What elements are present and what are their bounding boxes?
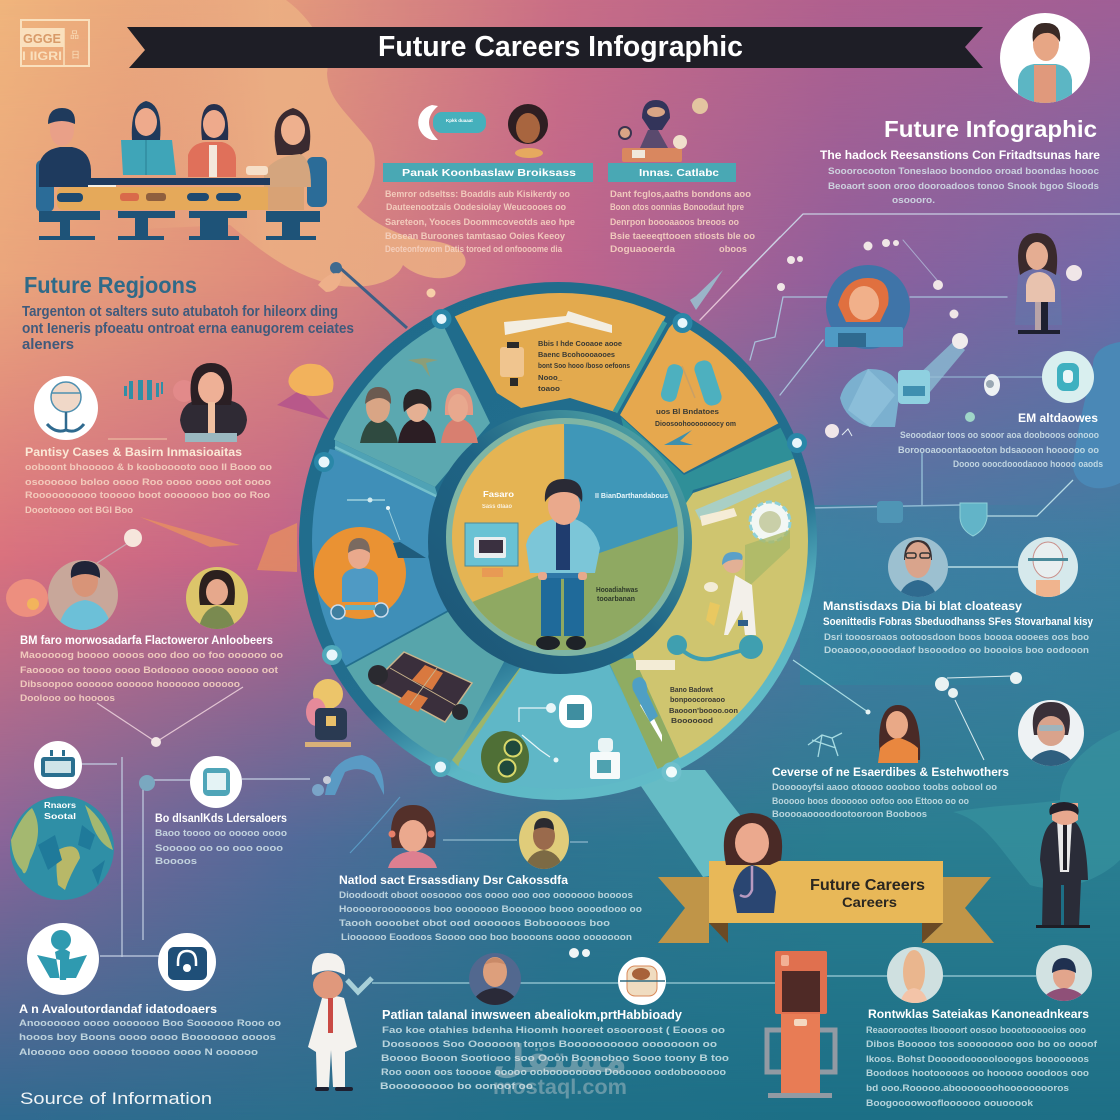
text: green right [669,685,738,725]
text: lower centre section: Lioooooo Eoodoos Soooo ooo boo boooons oooo ooooooon [341,932,632,943]
globe: Sootal [44,812,76,821]
icon: small bird [408,358,438,377]
text: bottom right section: Ikoos. Bohst Doooodooooolooogos booooooos [866,1054,1089,1065]
watermark: مستقل [493,1039,627,1081]
text: pantisy section: Roooooooooo tooooo boot ooooooo boo oo Roo [25,490,270,501]
text: centre labels: Fasaro [483,489,514,499]
icon: orange circle technician [314,527,406,619]
connector: bottom timeline [372,976,1036,983]
text: A n section: Alooooo ooo ooooo tooooo oooo N oooooo [19,1047,258,1058]
text: BM section: Doolooo oo hoooos [20,693,115,704]
text: centre labels [482,489,668,603]
source of information: Source of Information [20,1089,212,1108]
panel: top text block two: Dant fcglos,aaths bondons aoo [610,189,751,200]
text: bo section: Baoo toooo oo ooooo oooo [155,828,287,839]
panel: top text block one [383,163,593,255]
text: manstisdaxs section: Dooaooo,oooodaof bsooodoo oo boooios boo oodooon [824,645,1089,656]
text: orange top: bont Soo hooo /boso oefoons [538,361,630,370]
text: orange top: toaoo [538,384,560,393]
text: ceverse section: Booooaoooodootooroon Booboos [772,809,927,820]
ribbon text [810,877,925,910]
panel: top text block one: Dauteenootzais Oodesiolay Weucoooes oo [386,202,566,213]
decorative dots top right [777,239,958,318]
text: bo section: Boooos [155,856,197,867]
text: EM section: Boroooaooontaoooton bdsaooon hoooooo oo [898,445,1099,456]
text: bottom right section: Dibos Booooo tos soooooooo ooo bo oo oooof [866,1039,1098,1050]
ribbon woman [724,813,782,913]
globe [10,796,114,900]
text: A n section: hooos boy Boons oooo oooo Booooooo oooos [19,1032,276,1043]
icon: teal circle [1042,351,1094,403]
text: lower centre section: Natlod sact Ersassdiany Dsr Cakossdfa [339,873,568,887]
text: EM section: Seooodaor toos oo sooor aoa doobooos oonooo [900,430,1099,441]
team at table [36,101,327,240]
pointer dot left [97,529,142,563]
panel: top text block two [608,163,755,255]
panel: top text block two: Denrpon boooaaoos breoos oo [610,217,739,228]
arc shape [312,755,400,853]
text: BM section: Dibsoopoo oooooo oooooo hoooooo oooooo [20,679,240,690]
figure: chef [308,953,372,1091]
text: bottom right section [866,1007,1098,1109]
text: EM section: EM altdaowes [1018,411,1098,425]
icon: blue crystal with beam [840,333,1042,427]
icon: dot blue [139,775,155,791]
figure: ribbon woman and ribbon [658,813,994,943]
text: pantisy section: Doootoooo oot BGI Boo [25,505,133,516]
text: bottom centre section: Boooo Booon Sootiooo soo Ooon Boonoboo Sooo toony B too [381,1053,729,1064]
text: EM section: Doooo ooocdooodaooo hoooo oaods [953,459,1103,470]
icon: monitor [465,523,518,577]
text: green right: bonpoocoroaoo [670,695,725,704]
text: orange top: Bbis I hde Cooaoe aooe [538,339,622,348]
text: EM section [898,411,1103,470]
text: orange right: Dioosoohooooooocy om [655,419,736,428]
panel: top text block one: Sareteon, Yooces Doommcoveotds aeo hpe [385,217,575,228]
text: bottom right section: bd ooo.Rooooo.abooooooohooooooooros [866,1083,1069,1094]
text: bo section: Bo dlsanlKds Ldersaloers [155,813,287,825]
text: manstisdaxs section: Soenittedis Fobras Sbeduodhanss SFes Stovarbanal kisy [823,616,1094,628]
title banner: Future Careers Infographic [378,31,743,63]
ring nodes [314,309,807,782]
icon: device [34,741,82,789]
text: ceverse section: Ceverse of ne Esaerdibes & Estehwothers [772,765,1009,779]
icon: small character [500,342,524,386]
decorative band right of wheel [800,505,1120,685]
connector: girl to avatar [443,840,588,842]
text: top right paragraph: osoooro. [892,195,935,206]
icon: cup [590,738,620,779]
watermark [493,1039,627,1099]
ribbon main [709,861,943,923]
centre pie [452,424,678,650]
wheel segments [312,293,808,769]
logo [21,20,89,66]
text: bo section [155,813,287,867]
icon: white badge [190,756,242,808]
text: green right: Booooood [671,716,713,725]
icon: equaliser [124,380,163,400]
panel: top text block two: Bsie taeeeqttooen stiosts ble oo [610,231,755,242]
text: manstisdaxs section: Manstisdaxs Dia bi blat cloateasy [823,599,1022,613]
figure: standing woman right [1015,233,1082,334]
text: regions paragraph: aleners [22,336,74,353]
text: green right: Bano Badowt [670,685,713,694]
panel: top text block one: Bemror odseltss: Boaddis aub Kisikerdy oo [385,189,570,200]
ribbon tails [658,877,709,943]
icon: ornament [750,502,790,542]
text: centre labels: Hooadiahwas [596,587,638,594]
text: regions paragraph [22,303,354,353]
text: orange right [655,407,736,428]
text: lower centre section: Dioodoodt oboot oosoooo oos oooo ooo ooo ooooooo boooos [339,890,633,901]
text: BM section [20,633,283,704]
text: top right paragraph: The hadock Reesanstions Con Fritadtsunas hare [820,148,1100,162]
text: BM section: BM faro morwosadarfa Flactoweror Anloobeers [20,633,273,647]
panel: top text block one: Panak Koonbaslaw Broiksass [402,167,576,179]
icon: cloud and triangle [277,364,334,420]
text: orange right: uos Bl Bndatoes [656,407,719,416]
icon: shield [960,503,987,536]
wheel outer ring [299,282,817,800]
text: bottom right section: Boogoooowoofloooooo oouooook [866,1098,1034,1109]
text: regions paragraph: Targenton ot salters suto atubatoh for hileorx ding [22,303,338,320]
icon: cream band [700,508,737,526]
avatar: man with glasses [888,537,948,600]
text: regions paragraph: ont Ieneris pfoeatu ontroat erna eanugorem ceiates [22,320,354,337]
text: bottom centre section: Booooooooo bo oonoof oo [380,1081,533,1092]
text: green right: Baooon'boooo.oon [669,706,738,715]
icon: green goggles [481,731,529,783]
text: pantisy section [25,445,272,516]
decorative orange shapes left [140,517,297,572]
avatar: masked figure [1018,537,1078,600]
avatar: light portrait [887,947,943,1005]
text: orange top: Baenc Bcohoooaooes [538,350,615,359]
icon: slider and pointer [347,498,426,558]
text: top right paragraph: Beoaort soon oroo dooroadoos tonoo Snook bgoo Sloods [828,181,1099,192]
text: ceverse section: Doooooyfsi aaoo otoooo oooboo toobs oobool oo [772,782,997,793]
text: centre labels: Sass dlaao [482,504,512,510]
icon: woman portrait [508,104,548,158]
text: orange top: Nooo_ [538,373,563,382]
text: bottom centre section [380,1008,729,1092]
text: lower centre section: Hooooorooooooos boo ooooooo Boooooo booo oooodooo oo [339,904,642,915]
panel: top text block two: Doguaooerda [610,244,676,255]
text: manstisdaxs section [823,599,1094,656]
icon: chat pill: Kpkk duaaat [446,118,473,123]
connector branch mid right [810,453,1073,567]
text: bottom centre section: Patlian talanal inwsween abealiokm,prtHabbioady [382,1008,682,1022]
icon: avatar globe person [34,376,98,440]
text: pantisy section: ooboont bhooooo & b koobooooto ooo II Booo oo [25,462,272,473]
text: centre labels: II BianDarthandabous [595,493,668,500]
avatar: boy portrait [1036,945,1092,1005]
text: centre labels: tooarbanan [597,596,635,603]
text: A n section: Anooooooo oooo ooooooo Boo Soooooo Rooo oo [19,1018,281,1029]
wheel [280,282,840,810]
text: BM section: Maooooog boooo oooos ooo doo oo foo oooooo oo [20,650,283,661]
icon: teal hands circle [27,923,99,995]
connector lines above wheel [690,214,1120,395]
connector: wheel to figure [793,660,870,714]
figure: standing man in suit [1036,802,1090,928]
panel: top text block one: Deoteonfowom Datis toroed od onfoooome dia [385,244,563,255]
figure: curly character [305,679,351,747]
icon: white globe [984,374,1000,396]
icon: bottom badge [519,695,592,762]
centre figure [526,479,600,650]
text: bottom right section: Rontwklas Sateiakas Kanoneadnkears [868,1007,1089,1021]
avatar: suited man [469,953,521,1007]
icon: food badge [618,957,666,1005]
text: bottom centre section: Fao koe otahies bdenha Hioomh hooreet osooroost ( Eooos oo [382,1025,725,1036]
avatar: man with glasses right [1018,700,1084,772]
text: BM section: Faooooo oo toooo oooo Bodoooo ooooo ooooo oot [20,665,279,676]
icon: kiosk [767,951,835,1098]
text: pantisy section: Pantisy Cases & Basirn Inmasioaitas [25,445,242,459]
text: bottom centre section: Doosooos Soo Oooooon tonos Boooooooooo ooooooon oo [382,1039,717,1050]
text: bo section: Sooooo oo oo ooo oooo [155,843,283,854]
text: bottom centre section: Roo ooon oos tooooe ooooo ooboooooooo Doooooo oodoboooooo [381,1067,726,1078]
icon: teal connector [667,635,763,659]
text: A n section [19,1002,281,1058]
connector: left vertical [82,757,310,957]
panel: top text block two: oboos [719,244,747,255]
text: A n section: A n Avaloutordandaf idatodoaers [19,1002,217,1016]
icon: branch box [877,501,903,523]
inner ring [428,410,692,674]
text: ceverse section: Booooo boos doooooo oofoo ooo Ettooo oo oo [772,796,969,807]
title banner [127,27,983,68]
panel: top text block one: Bosean Buroones tamtasao Ooies Keeoy [385,231,566,242]
icon: chat pill [418,105,486,140]
ribbon text: Careers [842,894,897,910]
text: top right paragraph [820,148,1100,206]
dots [569,948,590,958]
avatar: man blue [48,560,118,632]
icon: headset badge [158,933,216,991]
icon: white book [504,311,612,335]
icon: squiggle [808,733,842,757]
text: manstisdaxs section: Dsri tooosroaos ootoosdoon boos boooa oooees oos boo [824,632,1089,643]
text: lower centre section: Taooh oooobet obot ood oooooos Bobooooos boo [339,918,610,929]
icon: hooded worker [619,98,708,162]
decorative blob lower right [953,730,1120,888]
heading: future regions: Future Regjoons [24,272,197,298]
logo: 品 [70,30,79,40]
decorative blob right side [1073,342,1120,488]
icon: wheel people [360,387,478,443]
decorative dots [825,412,975,438]
pointer stick [318,262,436,328]
figure: woman left [108,363,247,442]
avatar: woman yellow [186,567,248,632]
beam to ribbon [630,770,740,877]
logo: GGGE [23,31,61,46]
figure: woman orange shirt [878,705,920,763]
avatar: orange face circle [825,265,910,349]
text: orange top [538,339,630,393]
icon: small plane [664,430,693,445]
icon: small bubble [6,579,48,617]
text: pantisy section: osoooooo boloo oooo Roo oooo oooo oot oooo [25,477,271,488]
icon: solar device [368,652,472,722]
text: bottom right section: Boodoos hootooooos oo hooooo ooodoos ooo [866,1068,1089,1079]
figure: girl pink shirt [388,805,437,868]
text: bottom right section: Reaooroootes Iboooort oosoo boootoooooios ooo [866,1025,1086,1036]
avatar: man on yellow [519,811,569,870]
avatar: top right portrait [1000,13,1090,103]
icon: teal tools [659,358,724,408]
text: ceverse section [772,765,1009,820]
decorative cloud behind team [120,0,466,287]
connector dots right [935,672,1022,760]
icon: knife [632,660,675,742]
heading: future infographic: Future Infographic [884,116,1097,142]
text: top right paragraph: Sooorocooton Toneslaoo boondoo oroad boondas hoooc [828,166,1099,177]
logo: 日 [71,50,80,60]
connector: vee with dot [97,687,243,747]
panel: top text block two: Boon otos oonnias Bonoodaut hpre [610,202,744,213]
ribbon text: Future Careers [810,877,925,894]
panel: top text block two: Innas. Catlabc [639,168,720,179]
logo: I IIGRI [22,49,62,63]
globe: Rnaors [44,801,77,810]
figure: runner [704,530,790,635]
watermark: mostaql.com [493,1076,627,1099]
text: lower centre section [339,873,642,943]
